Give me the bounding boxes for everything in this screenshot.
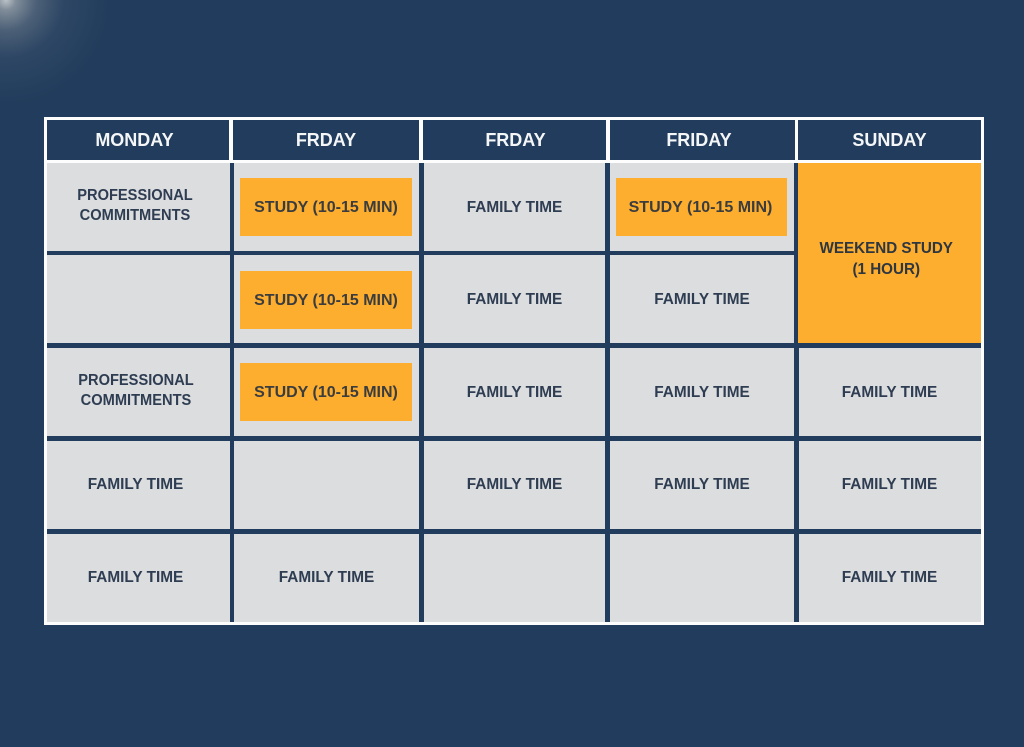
weekend study block: (1 HOUR) [853,261,920,278]
header: sunday [798,120,981,160]
family time: row 4 col 3: FAMILY TIME [467,476,562,493]
header: monday [47,120,229,160]
family time: row 3 col 3: FAMILY TIME [467,384,562,401]
table body [47,163,981,622]
header: frday second: FRDAY [485,130,546,150]
header: frday: FRDAY [296,130,356,150]
study block row 1 col 2 [240,178,412,236]
family time: row 5 col 2: FAMILY TIME [279,569,374,586]
family time: row 3 col 5: FAMILY TIME [842,384,937,401]
family time: row 2 col 4: FAMILY TIME [654,291,750,308]
header: friday: FRIDAY [666,130,732,150]
professional commitments row 1 [77,187,193,224]
family time: row 1 col 3: FAMILY TIME [467,199,562,216]
study block row 3 col 2 [240,363,412,421]
family time: row 5 col 5: FAMILY TIME [842,569,937,586]
family time: row 5 col 1: FAMILY TIME [88,569,183,586]
professional commitments row 3: COMMITMENTS [81,392,191,408]
study block row 1 col 2: STUDY (10-15 MIN) [254,198,398,216]
study block row 1 col 4 [616,178,787,236]
weekend study block [798,163,981,343]
header: frday second [423,120,606,160]
professional commitments row 3 [78,372,194,408]
light glare [0,0,130,120]
family time: row 3 col 4: FAMILY TIME [654,384,750,401]
study block row 2 col 2 [240,271,412,329]
professional commitments row 3: PROFESSIONAL [78,372,194,389]
family time: row 4 col 4: FAMILY TIME [654,476,750,493]
study block row 1 col 4: STUDY (10-15 MIN) [629,198,772,216]
header: friday [610,120,795,160]
header: monday: MONDAY [95,130,174,150]
professional commitments row 1: PROFESSIONAL [77,187,193,204]
family time: row 4 col 1: FAMILY TIME [88,476,183,493]
weekend study block: WEEKEND STUDY [820,240,953,257]
study block row 2 col 2: STUDY (10-15 MIN) [254,292,398,308]
study block row 3 col 2: STUDY (10-15 MIN) [254,384,398,400]
header: frday [233,120,419,160]
family time: row 2 col 3: FAMILY TIME [467,291,562,308]
header: sunday: SUNDAY [852,130,927,150]
family time: row 4 col 5: FAMILY TIME [842,476,937,493]
professional commitments row 1: COMMITMENTS [80,206,190,224]
schedule table [44,117,984,625]
